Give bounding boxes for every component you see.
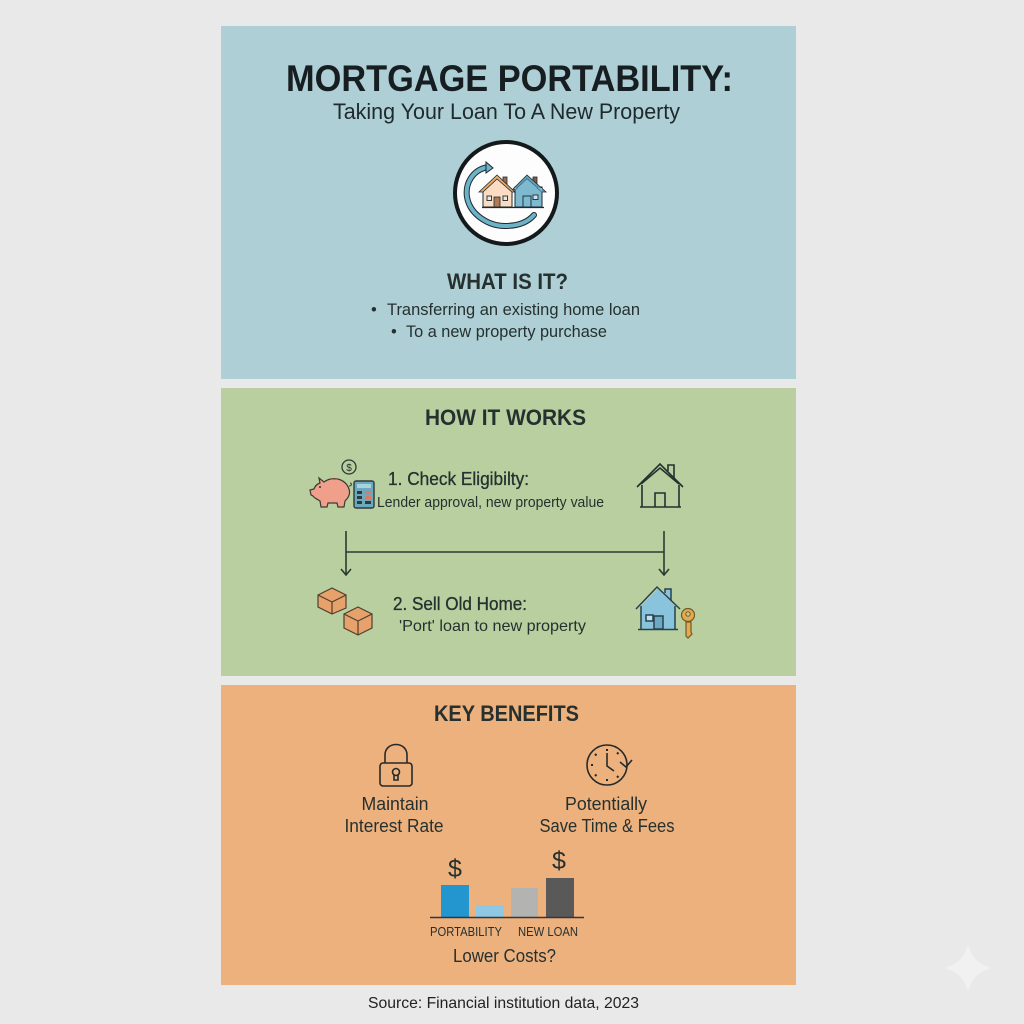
bar chart: lower costs: $ — [448, 855, 462, 883]
icon: houses in a circular arrow — [455, 142, 557, 244]
step 1 text: Lender approval, new property value — [377, 495, 604, 511]
step 2 text — [393, 594, 586, 635]
benefit: save time and fees: Potentially — [565, 794, 647, 814]
panel: what is it — [221, 26, 796, 379]
panel: how it works — [221, 388, 796, 676]
bullet list: • — [391, 323, 397, 341]
icon: piggy bank and calculator: $ — [346, 463, 352, 474]
bullet list: To a new property purchase — [406, 323, 607, 341]
icon: blue house with key — [636, 587, 694, 638]
source note: Source: Financial institution data, 2023 — [368, 995, 639, 1012]
icon: sparkle watermark — [944, 944, 992, 992]
bar chart: lower costs: Lower Costs? — [453, 946, 556, 966]
title: MORTGAGE PORTABILITY: — [286, 58, 733, 99]
icon: moving boxes — [318, 588, 372, 635]
benefit: maintain interest rate: Interest Rate — [344, 816, 444, 836]
heading: how it works: HOW IT WORKS — [425, 405, 586, 430]
icon: padlock — [380, 744, 412, 786]
bar chart: lower costs: NEW LOAN — [518, 925, 578, 939]
arrows between steps — [341, 531, 669, 575]
bullet list: Transferring an existing home loan — [387, 301, 640, 319]
step 2 text: 'Port' loan to new property — [399, 618, 586, 635]
bar chart: lower costs — [430, 847, 584, 966]
step 2 text: 2. Sell Old Home: — [393, 594, 527, 614]
benefit: maintain interest rate: Maintain — [362, 794, 428, 814]
bullet list: • — [371, 301, 377, 319]
heading: key benefits: KEY BENEFITS — [434, 701, 579, 726]
benefit: save time and fees — [540, 794, 674, 836]
heading: what is it: WHAT IS IT? — [447, 269, 568, 294]
subtitle: Taking Your Loan To A New Property — [333, 99, 680, 124]
step 1 text: 1. Check Eligibilty: — [388, 469, 529, 489]
benefit: maintain interest rate — [344, 794, 444, 836]
step 1 text — [377, 469, 604, 511]
bullet list — [371, 301, 640, 341]
icon: piggy bank and calculator — [310, 460, 374, 508]
panel: key benefits — [221, 685, 796, 985]
icon: clock with arrow — [587, 745, 632, 785]
icon: house outline — [637, 464, 683, 507]
bar chart: lower costs: $ — [552, 847, 566, 875]
bar chart: lower costs: PORTABILITY — [430, 925, 503, 939]
benefit: save time and fees: Save Time & Fees — [540, 816, 674, 836]
